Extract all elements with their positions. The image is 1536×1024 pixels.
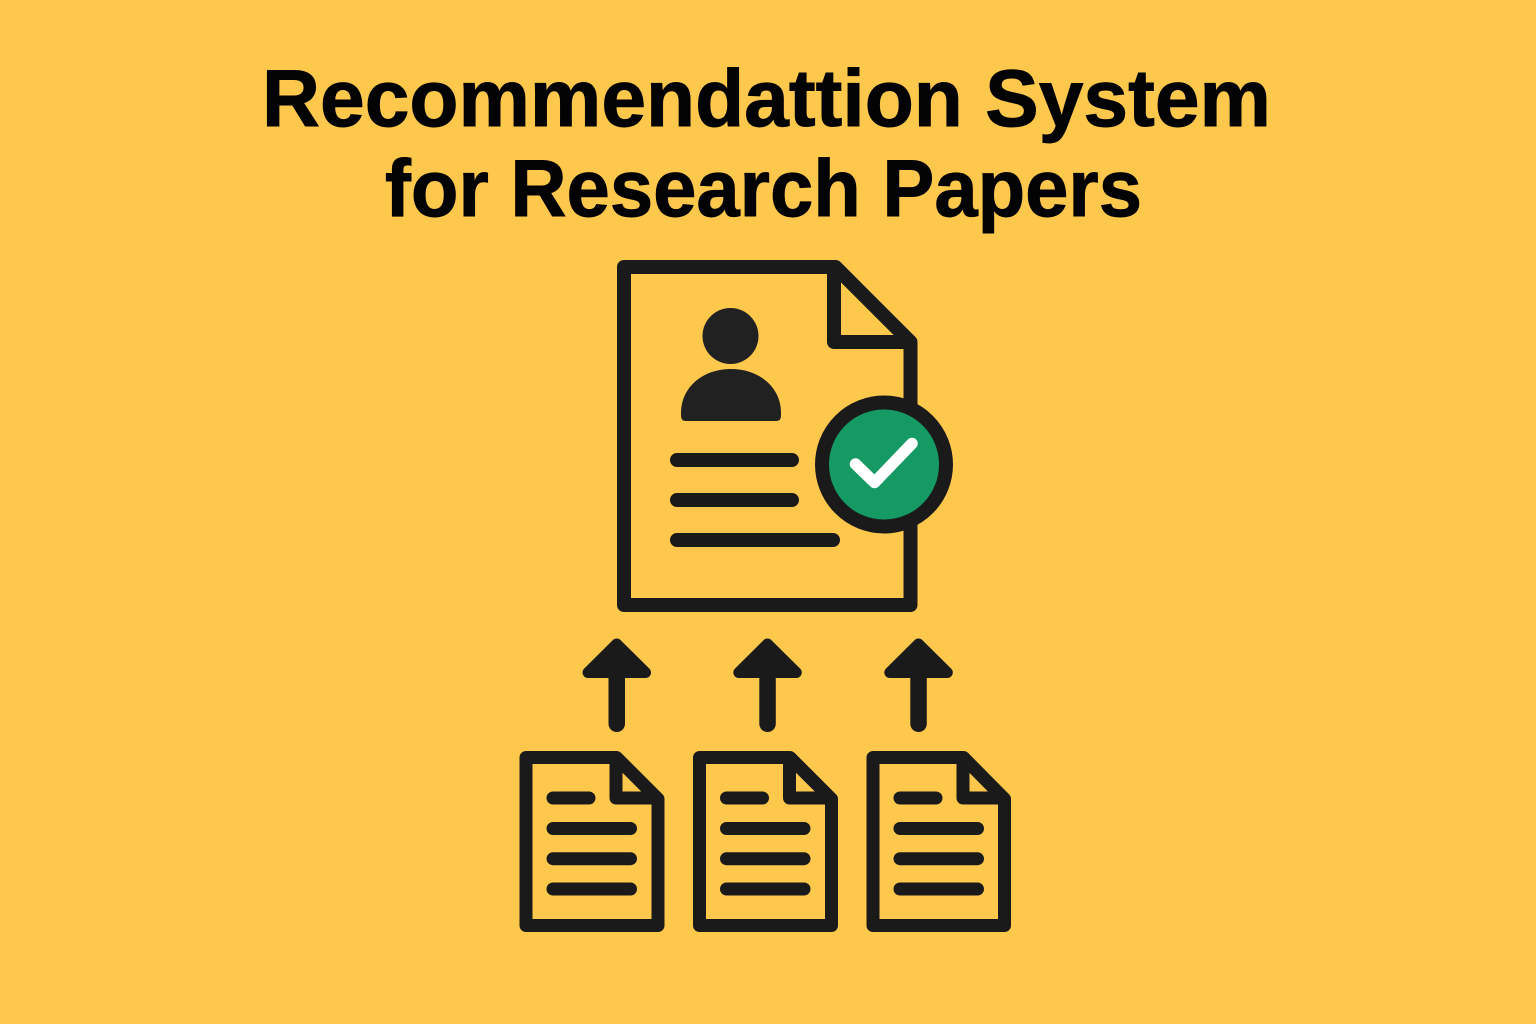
check mark	[856, 444, 912, 482]
arrow: center	[739, 644, 796, 732]
icon: input paper 1	[526, 758, 658, 926]
title	[262, 54, 1271, 234]
title: for Research Papers	[385, 144, 1142, 234]
arrow: left	[588, 644, 646, 732]
icon: green check badge	[822, 402, 946, 526]
icon: input paper 3	[873, 758, 1004, 926]
icon: input paper 2	[700, 758, 832, 926]
text lines	[677, 460, 833, 540]
folded corner	[834, 270, 910, 342]
document outline	[624, 267, 910, 605]
arrow: right	[890, 644, 947, 732]
icon: person head	[702, 308, 758, 364]
icon: main recommended paper	[624, 267, 946, 605]
icon: person body	[681, 369, 781, 421]
title: Recommendattion System	[262, 54, 1271, 144]
